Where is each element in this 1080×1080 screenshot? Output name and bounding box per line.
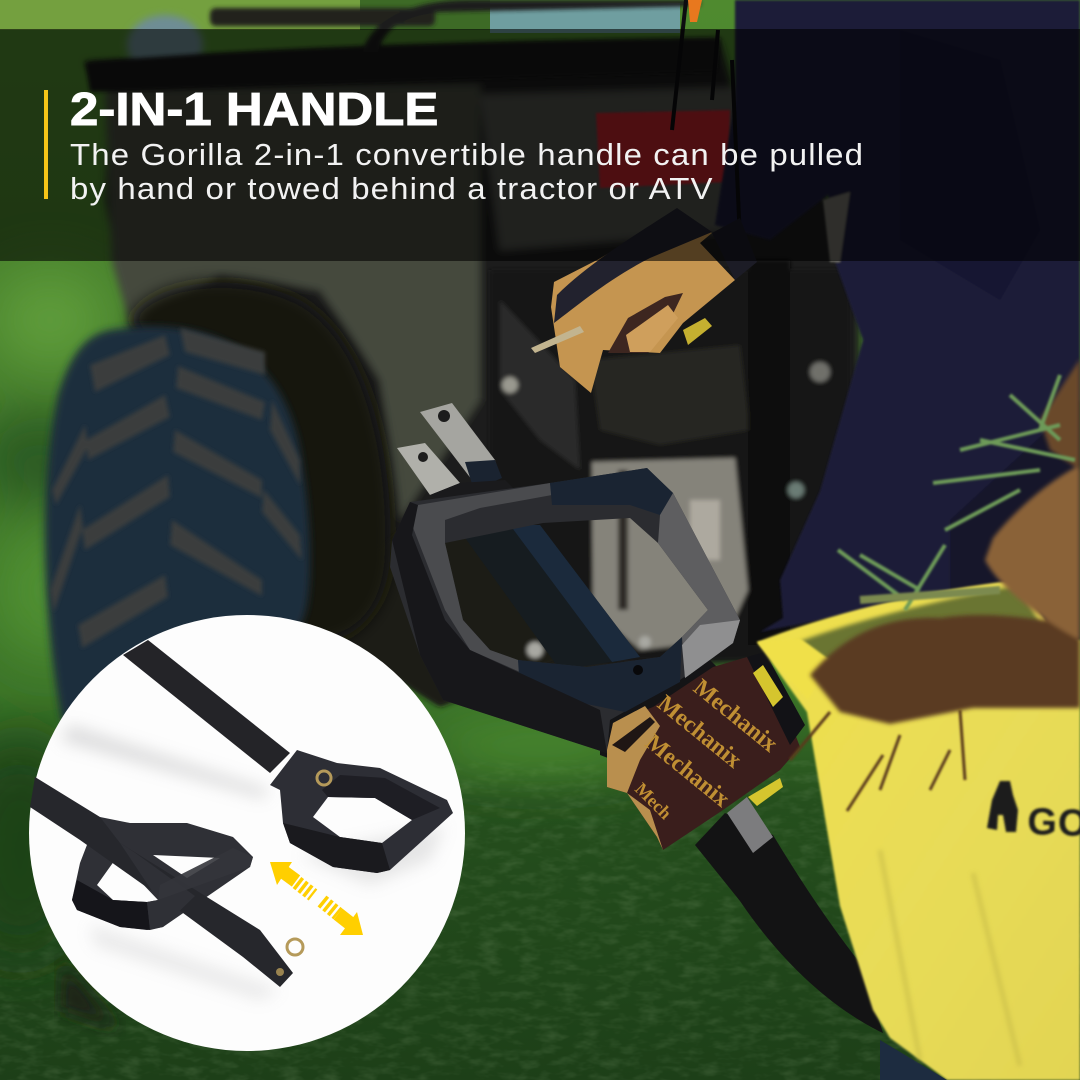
hanging cords xyxy=(672,0,740,240)
top background grass and teal xyxy=(0,0,360,30)
glove text: Mechanix xyxy=(640,729,734,813)
glove text: Mechanix xyxy=(688,674,782,758)
logo on cart xyxy=(987,781,1080,846)
title banner xyxy=(0,29,1080,261)
grass tufts xyxy=(838,375,1075,610)
soft shadows xyxy=(60,725,445,1000)
description text xyxy=(70,137,864,206)
shaft inside handle xyxy=(463,525,640,670)
orange tag xyxy=(688,0,702,22)
upper handle xyxy=(123,640,453,873)
lower handle xyxy=(30,777,303,987)
cart xyxy=(757,580,1080,1080)
tail light xyxy=(596,110,730,188)
soil and roots xyxy=(810,359,1080,724)
glove text xyxy=(631,674,782,823)
description text: The Gorilla 2-in-1 convertible handle can be pulled xyxy=(70,137,864,172)
large handle xyxy=(390,468,740,770)
fender arch shadow xyxy=(130,283,391,642)
towing tabs xyxy=(397,403,530,515)
upper glove xyxy=(531,208,757,393)
accent bar xyxy=(44,90,48,199)
description text: by hand or towed behind a tractor or ATV xyxy=(70,170,714,206)
handle tube xyxy=(695,813,883,1033)
worker sleeve and trousers xyxy=(715,0,1080,640)
glove text: Mech xyxy=(631,779,676,823)
white disc xyxy=(29,615,465,1051)
heading: 2-IN-1 HANDLE xyxy=(70,83,438,135)
lower glove xyxy=(607,652,805,850)
arrow: double-headed yellow xyxy=(270,862,363,935)
tyre xyxy=(45,326,310,1030)
ATV body xyxy=(85,15,860,705)
glove text: Mechanix xyxy=(652,690,746,774)
engine bay xyxy=(300,260,850,706)
